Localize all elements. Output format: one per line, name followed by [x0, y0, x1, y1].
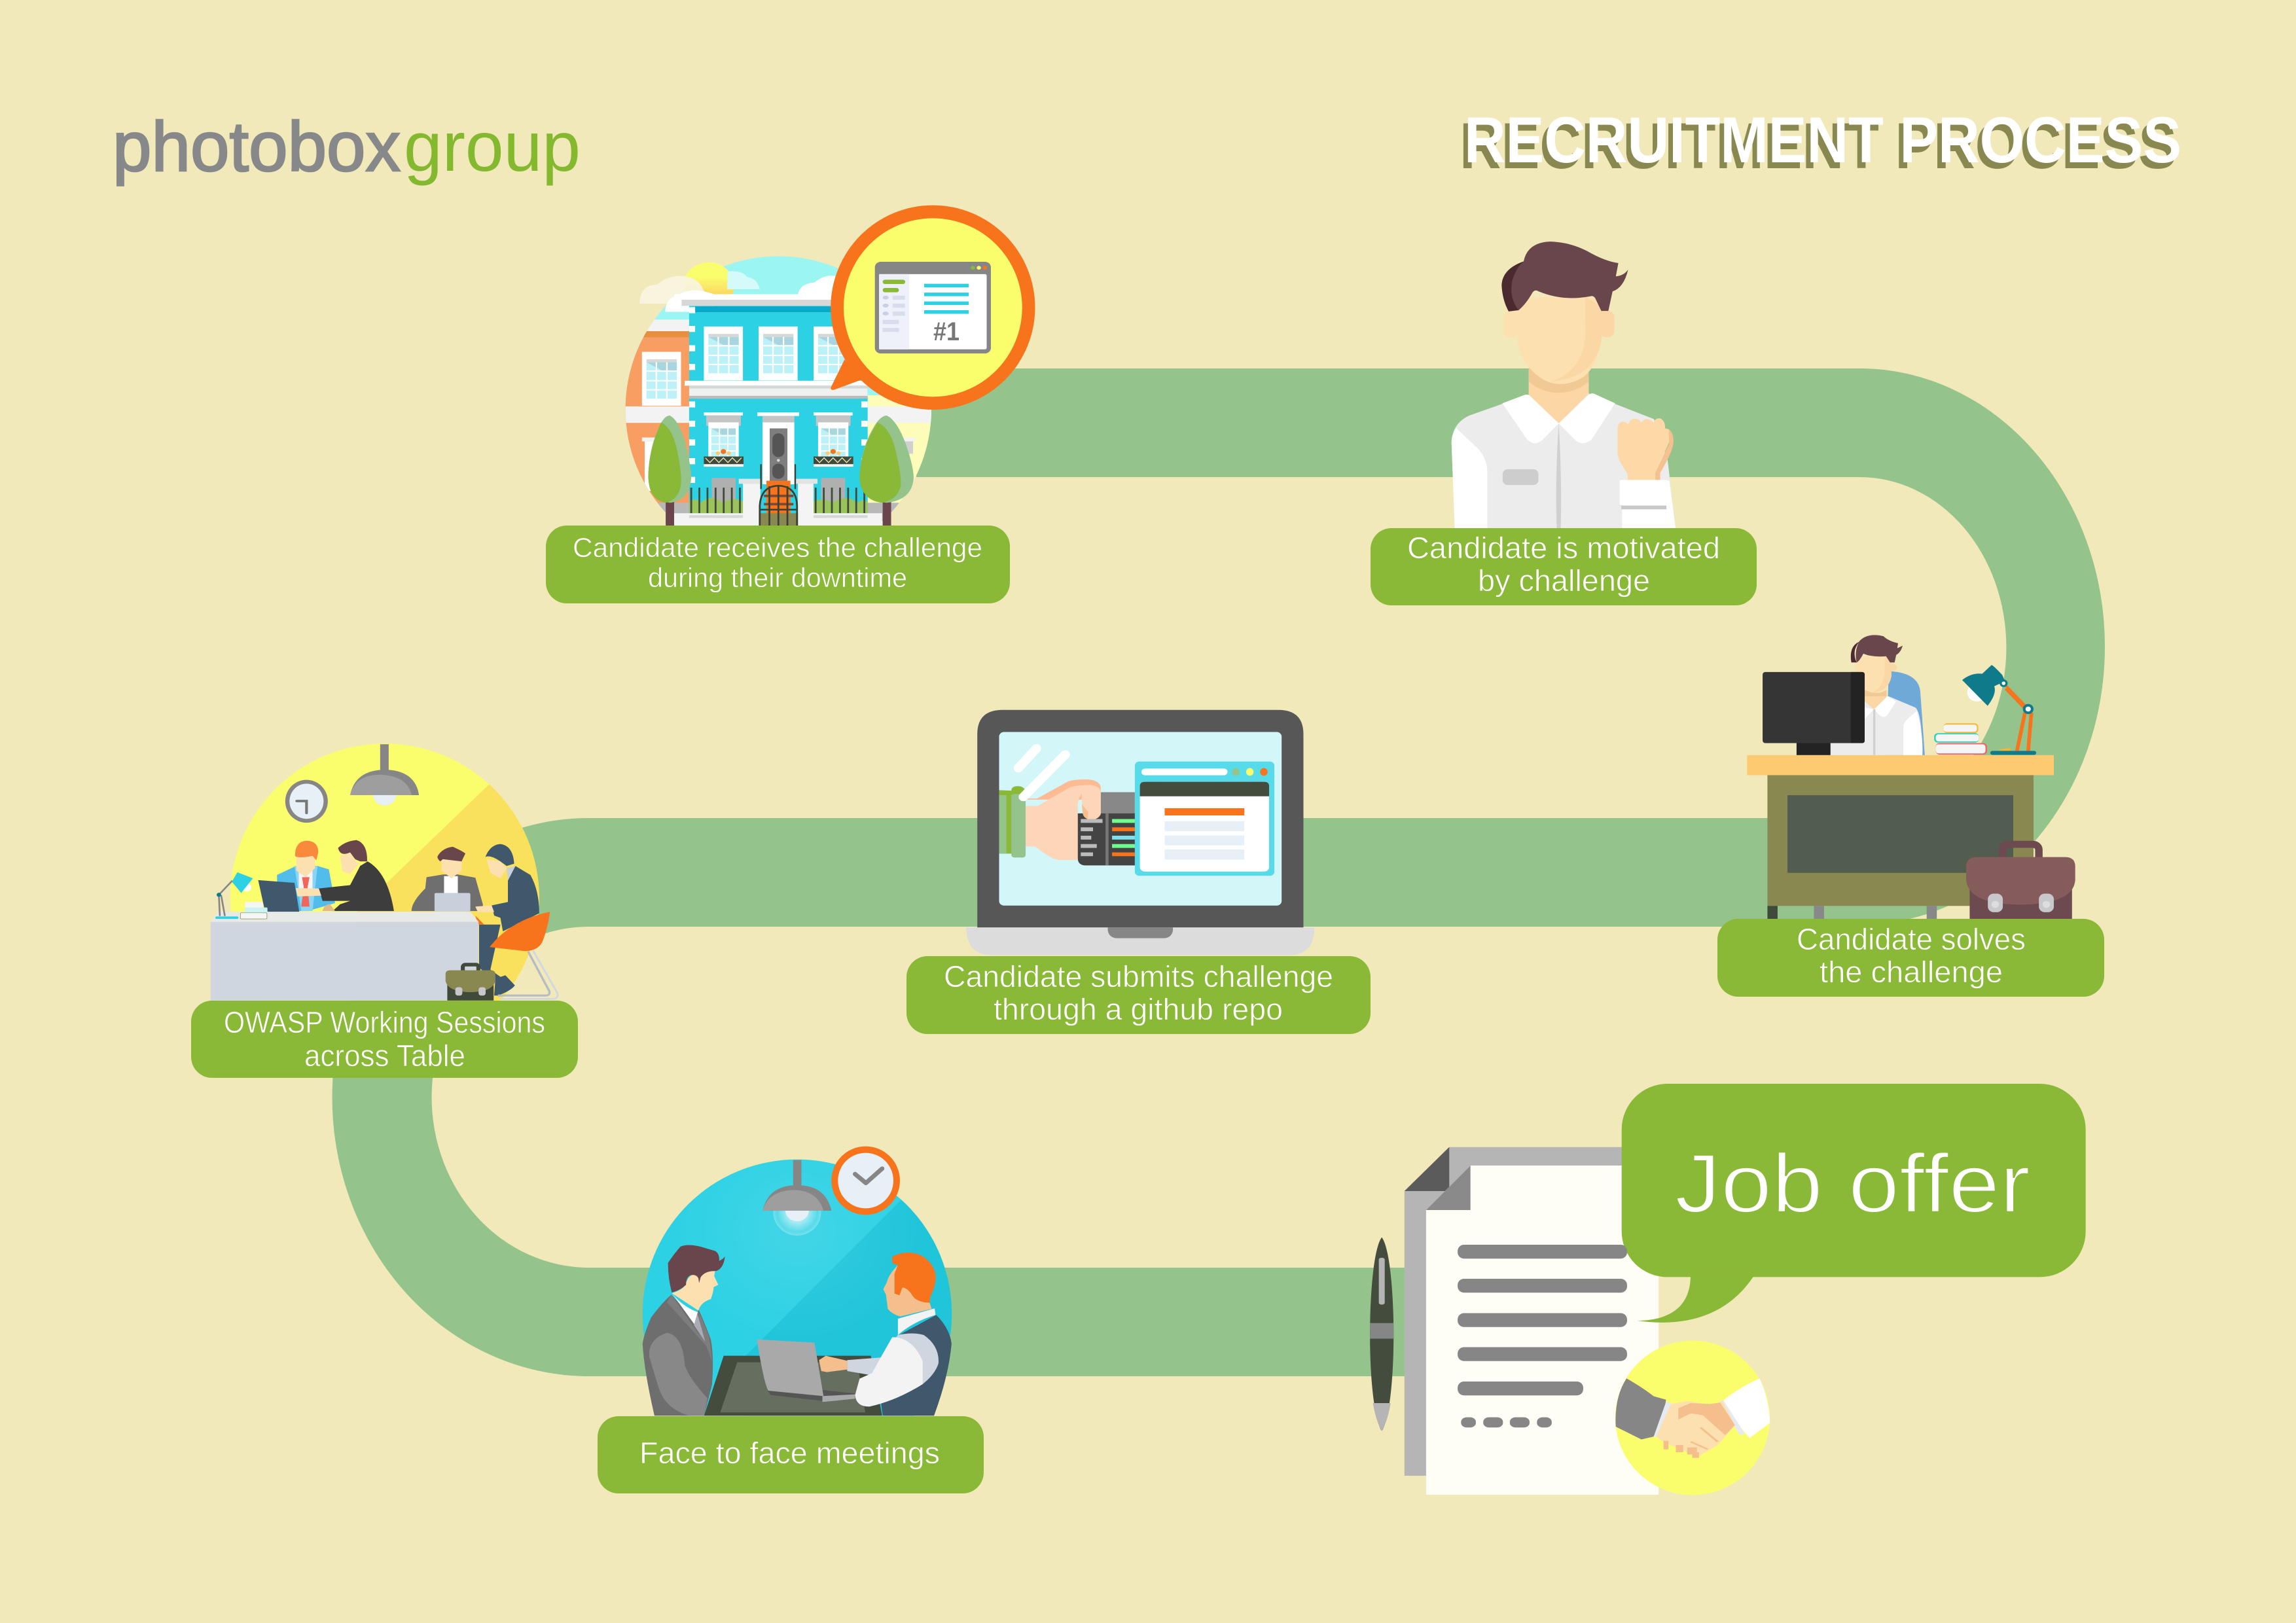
- monitor: [1763, 672, 1865, 755]
- clouds: [639, 276, 707, 304]
- logo: photobox group: [113, 107, 581, 186]
- steps and gate: [759, 464, 798, 526]
- caption: OWASP working sessions: [191, 1001, 578, 1078]
- caption: candidate solves the challenge: Candidate solves: [1797, 922, 2026, 956]
- step 7 illustration: job offer document: [1370, 1084, 2086, 1495]
- man on the right: [847, 1253, 952, 1416]
- winding process track: [332, 368, 2105, 1376]
- person in navy suit on chair: [475, 844, 539, 995]
- chair: [1886, 671, 1925, 755]
- person in blue jacket: [277, 841, 335, 911]
- document: [1405, 1147, 1659, 1495]
- briefcase: [1966, 844, 2075, 919]
- caption: candidate is motivated: Candidate is motivated: [1407, 531, 1720, 565]
- neck: [1529, 365, 1588, 423]
- ceiling lamp: [350, 744, 419, 806]
- person in grey jacket: [412, 847, 483, 912]
- sun: [683, 262, 734, 309]
- desk lamp: [1962, 665, 2036, 755]
- raised fist: [1617, 418, 1674, 509]
- caption: candidate receives the challenge: Candidate receives the challenge: [573, 532, 982, 563]
- right tree: [859, 416, 914, 526]
- step 6 illustration: face to face meeting: [643, 1147, 952, 1416]
- caption: face to face meetings: [598, 1416, 984, 1493]
- caption: candidate submits challenge: through a github repo: [994, 992, 1283, 1026]
- caption: OWASP working sessions: across Table: [304, 1039, 465, 1073]
- browser window: [1135, 762, 1274, 876]
- bubble label: #1: #1: [933, 317, 960, 346]
- seated man: [1830, 635, 1922, 755]
- step 1 illustration: townhouse with challenge bubble: [619, 205, 1035, 530]
- laptop body: [966, 710, 1314, 955]
- handshake badge: [1615, 1341, 1770, 1495]
- caption: candidate is motivated: [1371, 528, 1757, 605]
- pen: [1370, 1238, 1393, 1431]
- books: [1934, 723, 1987, 755]
- caption: candidate submits challenge: [906, 956, 1371, 1034]
- table: [211, 912, 484, 1001]
- step 4 illustration: laptop with github submission: [966, 710, 1314, 955]
- caption: candidate submits challenge: Candidate submits challenge: [944, 959, 1333, 993]
- table: [704, 1356, 882, 1416]
- scene circle with neighbouring houses: [619, 252, 938, 530]
- title: recruitment process: RECRUITMENT PROCESS: [1460, 109, 2177, 182]
- step 3 illustration: candidate at desk: [1747, 635, 2075, 919]
- head: [1501, 241, 1628, 384]
- caption: OWASP working sessions: OWASP Working Sessions: [224, 1005, 545, 1039]
- caption: candidate solves the challenge: the challenge: [1820, 955, 2003, 989]
- person in black jacket: [296, 840, 394, 911]
- shirt: [1452, 393, 1676, 529]
- desk: [1747, 755, 2054, 919]
- main blue house: [689, 306, 868, 526]
- man on the left: [643, 1245, 725, 1416]
- document lines: [1458, 1245, 1627, 1427]
- glare lines: [1018, 749, 1066, 797]
- room background: [227, 742, 565, 1001]
- dark laptop: [258, 880, 319, 918]
- speech bubble: [831, 205, 1035, 410]
- step 2 illustration: motivated man: [1452, 241, 1676, 529]
- logo: photobox group: photobox: [113, 107, 401, 186]
- ceiling lamp: [762, 1160, 831, 1236]
- left tree: [648, 416, 691, 526]
- clock with check: [831, 1147, 900, 1215]
- briefcase: [446, 965, 495, 1001]
- logo: photobox group: group: [404, 107, 581, 186]
- small lamp and books: [215, 872, 268, 919]
- step 5 illustration: working session around table: [211, 742, 565, 1001]
- title: recruitment process: RECRUITMENT PROCESS: [1464, 103, 2181, 176]
- silver laptop: [757, 1340, 855, 1402]
- job offer speech bubble: [1622, 1084, 2086, 1323]
- caption: candidate solves the challenge: [1717, 919, 2104, 997]
- caption: candidate receives the challenge: [546, 526, 1010, 603]
- arm pushing code: [999, 779, 1135, 865]
- orange chair: [490, 912, 558, 999]
- caption: candidate receives the challenge: during their downtime: [648, 562, 907, 593]
- front door: [757, 412, 799, 484]
- caption: candidate is motivated: by challenge: [1478, 563, 1650, 597]
- right man's hand: [819, 1356, 847, 1372]
- job offer text: Job offer: [1675, 1137, 2030, 1230]
- wall clock: [285, 780, 328, 823]
- caption: face to face meetings: Face to face meetings: [639, 1436, 940, 1470]
- room background: [643, 1160, 952, 1416]
- front garden walls and railings: [674, 478, 882, 526]
